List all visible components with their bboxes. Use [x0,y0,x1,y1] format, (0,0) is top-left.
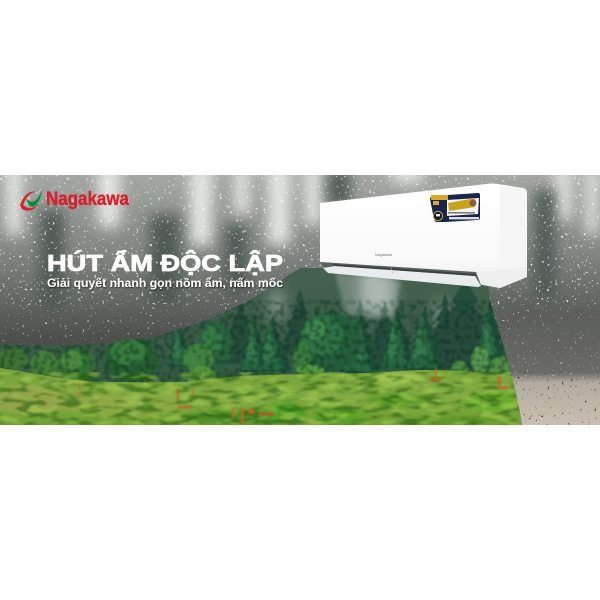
logo wordmark: Nagakawa [46,189,129,210]
photo band [0,165,600,426]
air conditioner unit [320,184,527,318]
air vent [320,262,481,285]
logo: Nagakawa [20,189,129,211]
badge: gold fin [430,193,480,222]
round bushes [0,312,512,382]
conifer forest [0,286,512,382]
panel: rainy window background [0,165,600,425]
subheading: Giải quyết nhanh gọn nồm ẩm, nấm mốc [47,276,283,290]
heading: HÚT ẨM ĐỘC LẬP [47,249,283,276]
brand mark on unit: Nagakawa [375,253,392,257]
grass meadow [0,368,530,426]
soft cold air [335,272,400,318]
panel: forest and meadow window [0,263,530,426]
louver flap [323,266,481,287]
mist between the trees [262,276,454,329]
unit body [320,184,527,288]
side panel [500,186,527,208]
banner: dehumidifying air conditioner [0,175,600,425]
icon: red and green swoosh [20,190,42,211]
orange wildflowers [76,368,508,424]
